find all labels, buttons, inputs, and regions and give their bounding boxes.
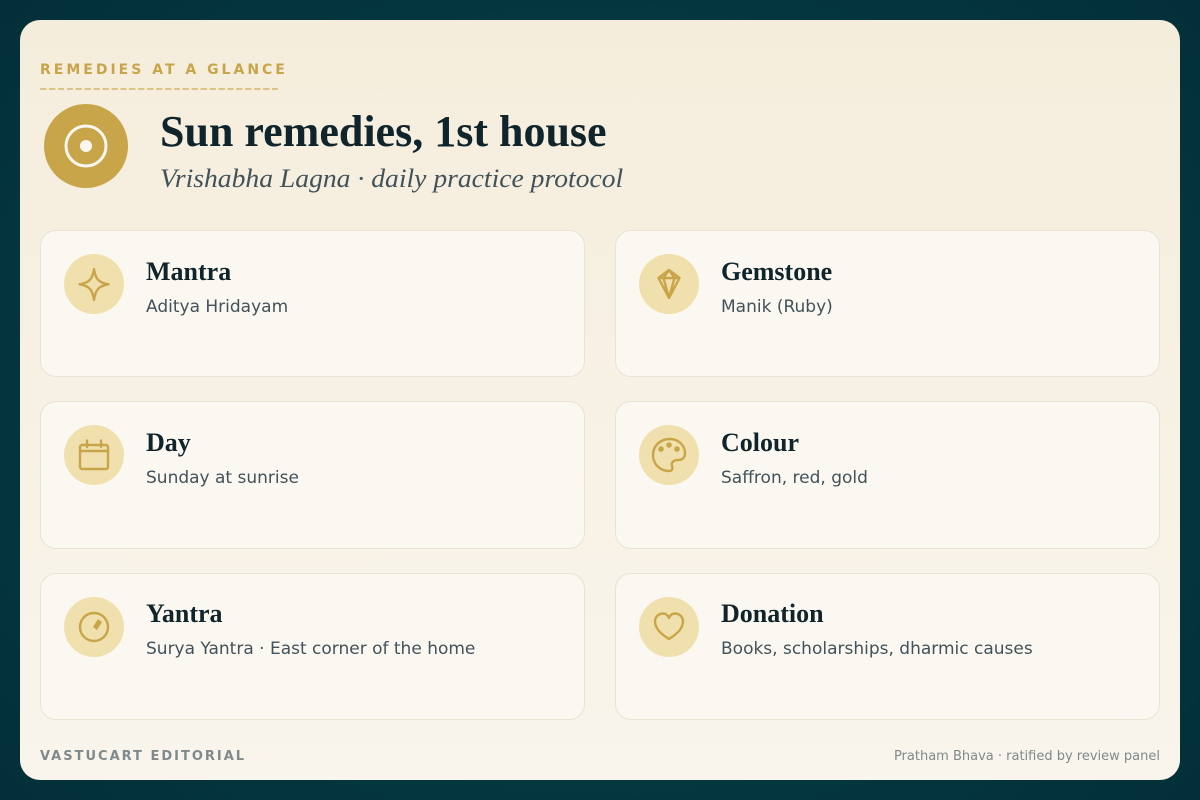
- subtitle: Vrishabha Lagna · daily practice protocol: [160, 164, 623, 193]
- heading: Gemstone: [721, 256, 832, 286]
- heading: Yantra: [146, 599, 223, 628]
- dashed rule: [40, 88, 278, 90]
- card: Donation: [615, 573, 1160, 720]
- footer: brand: VASTUCART EDITORIAL: [40, 749, 246, 764]
- icon: sun emblem: [44, 104, 128, 188]
- heading: Colour: [721, 428, 799, 457]
- card: Day: [40, 401, 585, 549]
- icon: calendar: [64, 425, 124, 485]
- icon: gem: [639, 254, 699, 314]
- text: Sunday at sunrise: [146, 468, 299, 488]
- heading: Donation: [721, 599, 824, 628]
- text: Saffron, red, gold: [721, 468, 868, 488]
- text: Surya Yantra · East corner of the home: [146, 639, 475, 659]
- heading: Mantra: [146, 256, 231, 286]
- icon: palette: [639, 425, 699, 485]
- card: Yantra: [40, 573, 585, 720]
- eyebrow label: REMEDIES AT A GLANCE: [40, 62, 288, 78]
- text: Manik (Ruby): [721, 297, 833, 317]
- card: Gemstone: [615, 230, 1160, 377]
- card: Colour: [615, 401, 1160, 549]
- icon: four-point star: [64, 254, 124, 314]
- icon: heart: [639, 597, 699, 657]
- title: Sun remedies, 1st house: [160, 107, 607, 156]
- text: Books, scholarships, dharmic causes: [721, 639, 1033, 659]
- text: Aditya Hridayam: [146, 297, 288, 317]
- heading: Day: [146, 428, 191, 457]
- footer: note: Pratham Bhava · ratified by review panel: [894, 749, 1160, 764]
- card: Mantra: [40, 230, 585, 377]
- icon: compass: [64, 597, 124, 657]
